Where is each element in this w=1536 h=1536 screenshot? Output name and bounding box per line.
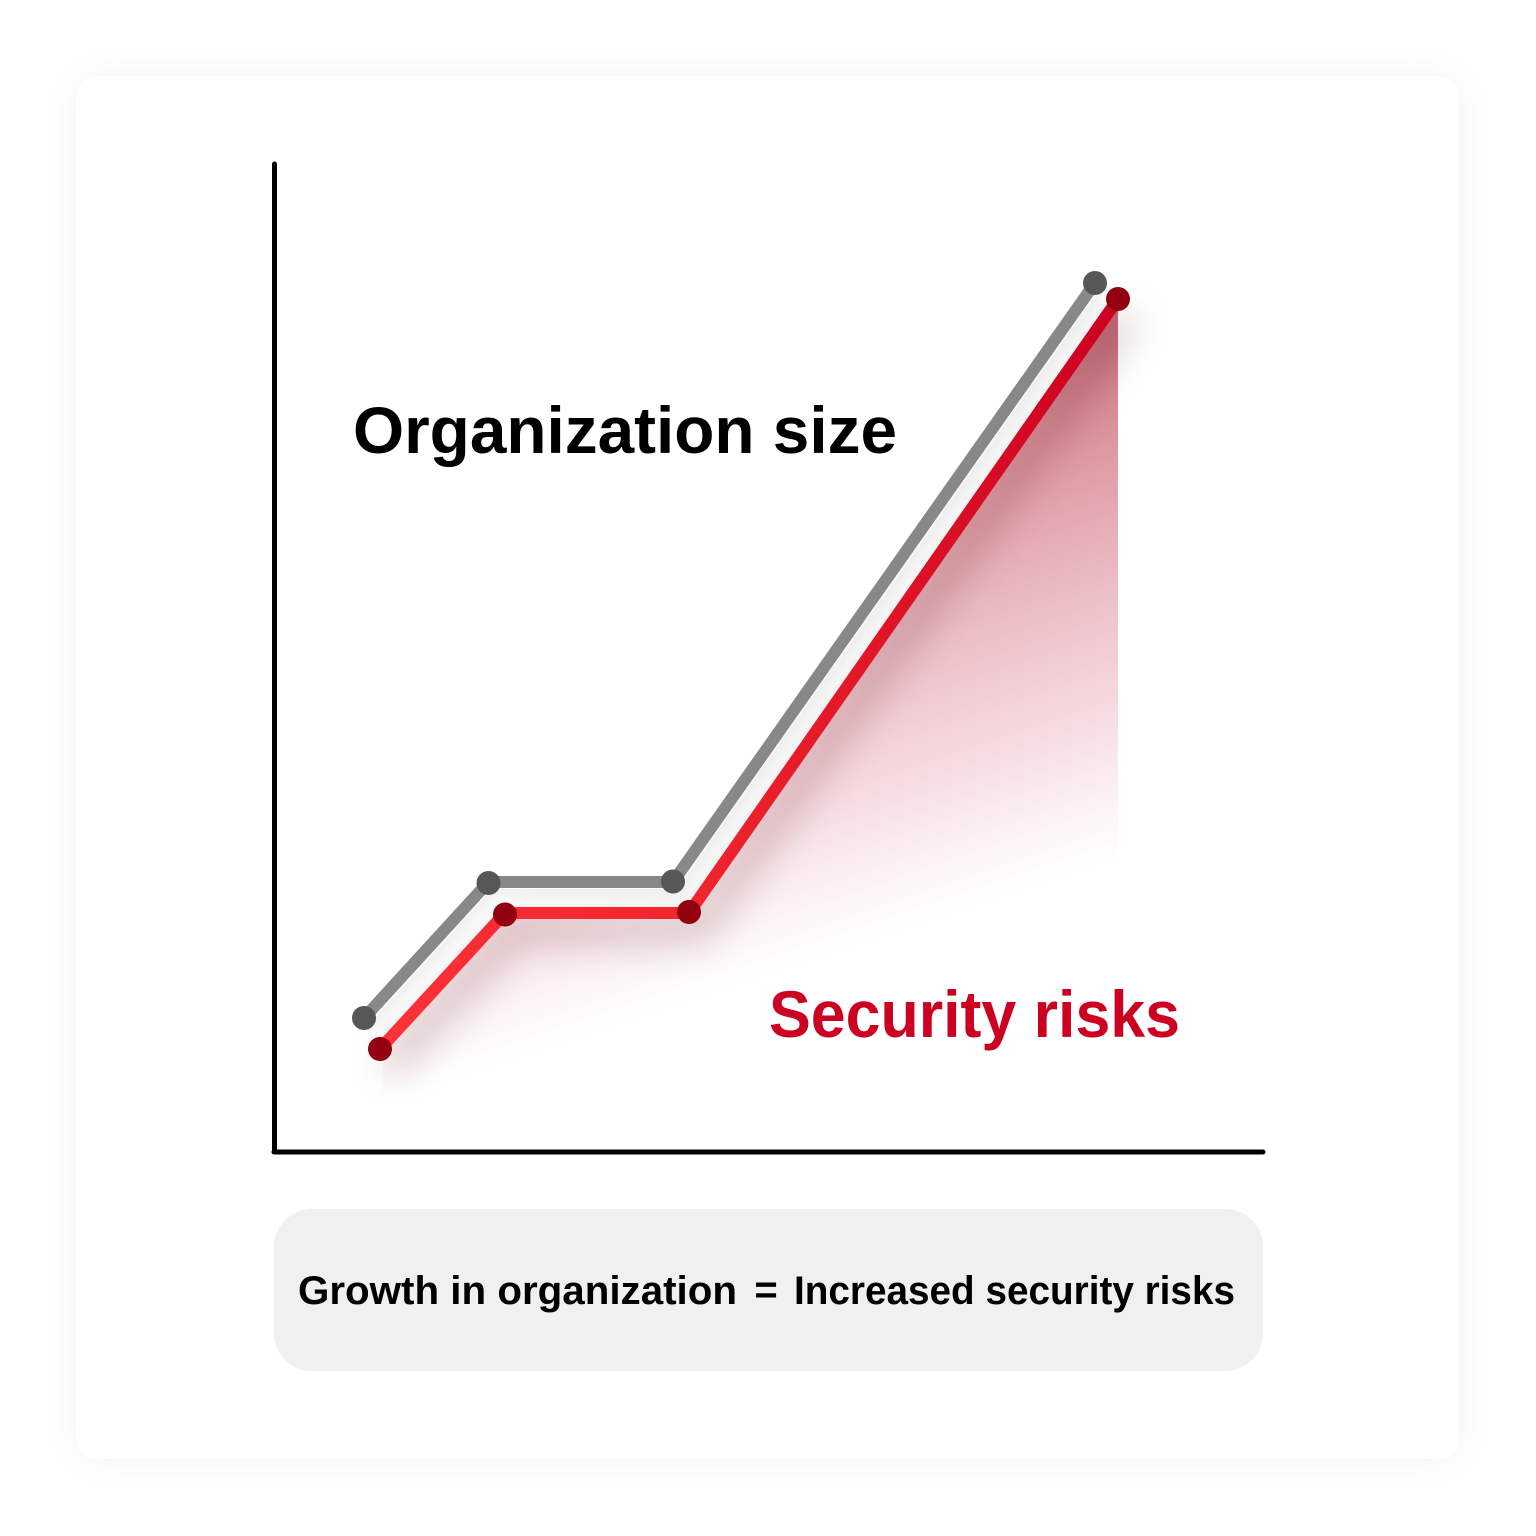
callout right text: Increased security risks (794, 1269, 1235, 1313)
label: organization size: Organization size (353, 393, 897, 467)
x axis (274, 1150, 1263, 1154)
y axis (272, 164, 277, 1152)
shaded area under security risks line (383, 299, 1118, 1102)
label: security risks: Security risks (769, 977, 1180, 1051)
callout: summary box (274, 1209, 1263, 1371)
security risks line (368, 287, 1130, 1061)
chart and callout (272, 162, 1266, 1371)
organization size line (352, 271, 1107, 1030)
equals sign: = (754, 1268, 778, 1312)
shadow under lines (368, 290, 1128, 1067)
callout left text: Growth in organization (298, 1269, 737, 1313)
